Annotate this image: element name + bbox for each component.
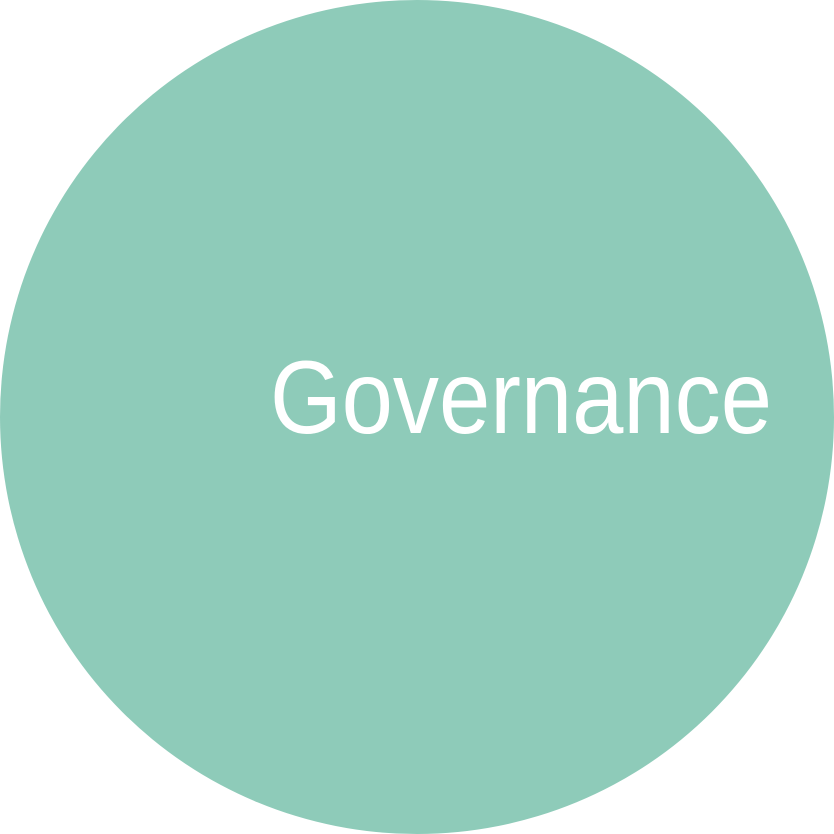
title: Governance: Governance [270, 340, 772, 456]
